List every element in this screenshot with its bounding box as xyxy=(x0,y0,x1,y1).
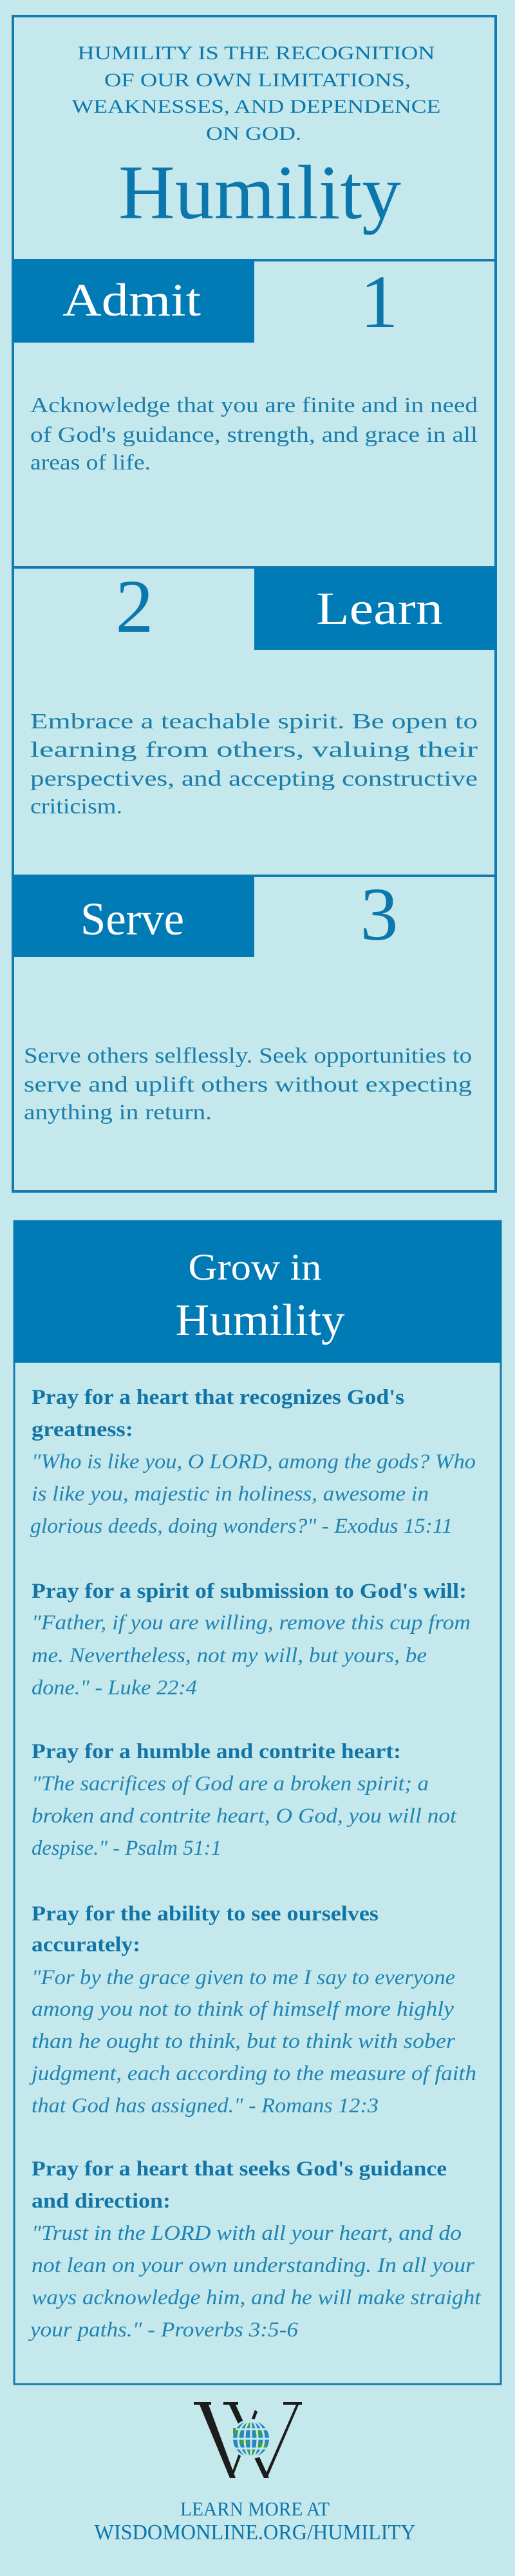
step 3: Serve xyxy=(13,872,472,1124)
tagline: OF OUR OWN LIMITATIONS, xyxy=(104,70,411,91)
prayer 2: me. Nevertheless, not my will, but yours, be xyxy=(32,1644,427,1667)
title: Humility xyxy=(118,149,401,235)
prayer 1: greatness: xyxy=(32,1418,133,1441)
step 1: Admit: of God's guidance, strength, and grace in all xyxy=(30,423,478,447)
prayer 5: Pray for a heart that seeks God's guidance xyxy=(32,2157,447,2181)
prayer 5 xyxy=(28,2157,482,2342)
step 2: Learn: Embrace a teachable spirit. Be open to xyxy=(30,710,478,734)
footer text: LEARN MORE AT xyxy=(180,2497,330,2520)
prayer 3: despise." - Psalm 51:1 xyxy=(32,1837,221,1860)
footer text xyxy=(94,2497,416,2544)
prayer 4: that God has assigned." - Romans 12:3 xyxy=(32,2094,379,2117)
step 1: Admit: areas of life. xyxy=(30,451,151,475)
prayer 2 xyxy=(32,1580,471,1700)
prayer 1: glorious deeds, doing wonders?" - Exodus 15:11 xyxy=(30,1515,453,1538)
prayer 3: Pray for a humble and contrite heart: xyxy=(32,1740,401,1763)
panel: humility steps xyxy=(13,16,496,1191)
tagline xyxy=(72,43,440,144)
prayer 4 xyxy=(29,1902,476,2117)
prayer 3 xyxy=(32,1740,457,1860)
prayer 2: Pray for a spirit of submission to God's will: xyxy=(32,1580,467,1603)
prayer 2: "Father, if you are willing, remove this cup from xyxy=(32,1611,471,1634)
prayer 4: than he ought to think, but to think with sober xyxy=(32,2030,455,2053)
step 1: Admit: Acknowledge that you are finite and in need xyxy=(30,393,478,417)
tagline: ON GOD. xyxy=(206,123,301,144)
prayer 5: "Trust in the LORD with all your heart, and do xyxy=(32,2222,462,2245)
prayer 5: and direction: xyxy=(32,2190,171,2213)
step 3: Serve: 3 xyxy=(360,872,398,956)
step 2: Learn: Learn xyxy=(316,583,443,634)
step 2: Learn: perspectives, and accepting constructive xyxy=(30,767,478,791)
step 3: Serve: anything in return. xyxy=(24,1101,212,1124)
step 2: Learn: criticism. xyxy=(30,795,122,819)
step 3: Serve: Serve others selflessly. Seek opportunities to xyxy=(24,1044,472,1068)
prayer 3: "The sacrifices of God are a broken spirit; a xyxy=(32,1772,429,1795)
header: grow in humility: Humility xyxy=(175,1296,345,1345)
prayer 2: done." - Luke 22:4 xyxy=(32,1676,197,1700)
step 1: Admit: 1 xyxy=(360,260,398,344)
step 3: Serve: serve and uplift others without expecting xyxy=(24,1073,472,1097)
header: grow in humility: Grow in xyxy=(188,1246,322,1288)
prayer 5: not lean on your own understanding. In all your xyxy=(32,2254,474,2277)
step 1: Admit: Admit xyxy=(62,274,201,326)
icon: wisdom online logo xyxy=(194,2402,302,2478)
prayer 1: is like you, majestic in holiness, awesome in xyxy=(32,1482,429,1506)
step 3: Serve: Serve xyxy=(80,893,184,945)
prayer 5: ways acknowledge him, and he will make straight xyxy=(32,2286,482,2309)
tagline: WEAKNESSES, AND DEPENDENCE xyxy=(72,96,440,117)
step 1: Admit xyxy=(13,260,478,475)
step 2: Learn: 2 xyxy=(116,564,153,649)
prayer 4: "For by the grace given to me I say to everyone xyxy=(32,1966,455,1989)
prayer 5: your paths." - Proverbs 3:5-6 xyxy=(28,2318,299,2342)
prayer 4: Pray for the ability to see ourselves xyxy=(32,1902,379,1926)
step 2: Learn xyxy=(30,564,496,819)
step 2: Learn: learning from others, valuing their xyxy=(30,738,478,762)
prayer 4: among you not to think of himself more highly xyxy=(32,1998,454,2021)
prayer 1: Pray for a heart that recognizes God's xyxy=(32,1386,404,1409)
prayer 4: accurately: xyxy=(32,1933,140,1956)
panel: grow in humility xyxy=(14,1221,501,2384)
icon: globe xyxy=(231,2419,271,2459)
footer text: WISDOMONLINE.ORG/HUMILITY xyxy=(94,2521,416,2544)
prayer 3: broken and contrite heart, O God, you will not xyxy=(32,1804,457,1828)
prayer 4: judgment, each according to the measure of faith xyxy=(29,2062,476,2085)
tagline: HUMILITY IS THE RECOGNITION xyxy=(77,43,435,64)
prayer 1 xyxy=(30,1386,476,1538)
prayer 1: "Who is like you, O LORD, among the gods? Who xyxy=(32,1450,476,1473)
header: grow in humility xyxy=(14,1221,501,1363)
